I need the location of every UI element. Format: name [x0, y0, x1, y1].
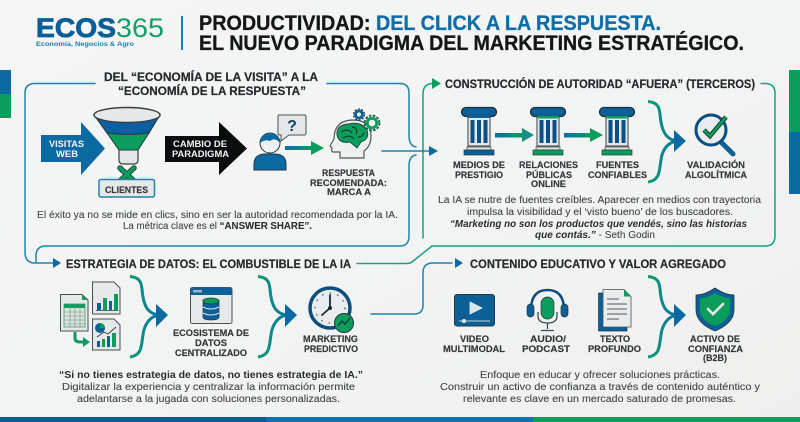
- column labels: [453, 160, 647, 189]
- label: respuesta recomendada: RESPUESTA: [322, 168, 375, 178]
- label: respuesta recomendada: RECOMENDADA:: [310, 178, 387, 188]
- body text: “Si no tienes estrategia de datos, no tienes estrategia de IA.”: [59, 369, 363, 381]
- arrow: cambio de paradigma: [165, 122, 247, 175]
- title: EL NUEVO PARADIGMA DEL MARKETING ESTRATÉGICO.: [199, 32, 744, 55]
- icon: podcast: [527, 290, 568, 330]
- icon: pie and trend document: [92, 319, 120, 350]
- column labels: FUENTES: [596, 160, 639, 170]
- brace arrow: [648, 276, 686, 357]
- panel heading: ESTRATEGIA DE DATOS: EL COMBUSTIBLE DE LA IA: [66, 259, 351, 271]
- body text: [59, 369, 363, 405]
- label: marketing predictivo: [303, 334, 358, 354]
- label: validacion: [685, 159, 747, 180]
- body text: “Marketing no son los productos que vendés, sino las historias: [450, 218, 747, 230]
- column labels: VIDEO: [460, 334, 489, 344]
- arrow: [495, 128, 534, 142]
- body text: relevante es clave en un mercado saturado de promesas.: [463, 393, 736, 405]
- panel heading: DEL “ECONOMÍA DE LA VISITA” A LA: [104, 71, 318, 84]
- arrow tips: [53, 78, 463, 268]
- column labels: AUDIO/: [530, 334, 567, 344]
- label: activo de confianza: [688, 334, 744, 363]
- column labels: RELACIONES: [519, 160, 578, 170]
- arrow: visitas web: VISITAS: [49, 139, 84, 149]
- bottom color bar: [0, 417, 800, 422]
- column labels: ONLINE: [531, 179, 566, 189]
- panel: estrategia de datos: [59, 259, 363, 405]
- panel: economia de la respuesta: [37, 71, 398, 232]
- label: marketing predictivo: PREDICTIVO: [304, 344, 358, 354]
- header divider: [181, 16, 183, 50]
- panel heading: [104, 71, 318, 98]
- label: activo de confianza: (B2B): [703, 353, 727, 363]
- body text: [438, 194, 761, 241]
- column labels: PRESTIGIO: [455, 170, 503, 180]
- column labels: [443, 334, 641, 354]
- body text: adelantarse a la jugada con soluciones personalizadas.: [77, 393, 340, 405]
- panel heading: “ECONOMÍA DE LA RESPUESTA”: [118, 85, 306, 98]
- title: [199, 12, 744, 55]
- icon: person with question: [254, 115, 306, 170]
- column labels: PÚBLICAS: [526, 169, 572, 180]
- label: activo de confianza: CONFIANZA: [688, 344, 744, 354]
- left side accent: [0, 70, 11, 118]
- body text: [440, 369, 761, 405]
- label: respuesta recomendada: MARCA A: [327, 187, 372, 197]
- label: ecosistema: [173, 328, 249, 358]
- column labels: MULTIMODAL: [443, 344, 506, 354]
- arrow: to answer: [285, 141, 324, 155]
- icon: column 3: [600, 108, 634, 155]
- logo: 365: [116, 13, 164, 43]
- icon: magnifier check: [696, 115, 733, 154]
- connector frames: [25, 84, 775, 314]
- arrow: cambio de paradigma: CAMBIO DE: [173, 139, 227, 149]
- icon: x mark: [120, 168, 134, 181]
- icon: data window: [190, 288, 232, 324]
- body text: El éxito ya no se mide en clics, sino en ser la autoridad recomendada por la IA.: [37, 209, 398, 221]
- title: PRODUCTIVIDAD: DEL CLICK A LA RESPUESTA.: [199, 12, 661, 35]
- label: ecosistema: DATOS: [195, 338, 227, 348]
- label: activo de confianza: ACTIVO DE: [690, 334, 740, 344]
- icon: shield: [696, 288, 734, 331]
- icon: column 1: [462, 108, 496, 155]
- body text: Enfoque en educar y ofrecer soluciones prácticas.: [480, 369, 720, 381]
- brace arrow: [130, 276, 168, 357]
- column labels: MEDIOS DE: [453, 160, 505, 170]
- column labels: PODCAST: [522, 344, 571, 354]
- icon: brain head with gears: [330, 109, 380, 158]
- icon: bar chart document: [92, 282, 120, 314]
- label: marketing predictivo: MARKETING: [303, 334, 358, 344]
- clientes box: [99, 180, 154, 197]
- arrow: cambio de paradigma: PARADIGMA: [172, 149, 230, 159]
- icon: video: [454, 294, 494, 326]
- column labels: PROFUNDO: [588, 344, 641, 354]
- brace arrow: [258, 276, 297, 357]
- icon: clock with trend: [310, 288, 354, 332]
- icon: green curved arrow: [75, 332, 90, 347]
- column labels: TEXTO: [600, 334, 630, 344]
- logo: Economía, Negocios & Agro: [36, 41, 134, 48]
- label: respuesta recomendada: [310, 168, 387, 197]
- icon: funnel: [94, 108, 160, 164]
- body text: [37, 209, 398, 232]
- label: validacion: VALIDACIÓN: [687, 159, 745, 170]
- icon: column 2: [530, 108, 566, 155]
- label: ecosistema: ECOSISTEMA DE: [173, 328, 249, 338]
- logo: [36, 13, 164, 48]
- right side accent: [789, 70, 800, 194]
- brace arrow: [648, 102, 686, 182]
- arrow: visitas web: [41, 122, 105, 175]
- column labels: CONFIABLES: [588, 170, 647, 180]
- panel: contenido educativo: [440, 259, 761, 405]
- clientes box: CLIENTES: [105, 185, 148, 195]
- arrow: [564, 128, 603, 142]
- icon: document: [598, 290, 631, 331]
- icon: spreadsheet: [60, 294, 88, 331]
- panel heading: CONSTRUCCIÓN DE AUTORIDAD “AFUERA” (TERCEROS): [445, 78, 755, 91]
- body text: La IA se nutre de fuentes creíbles. Aparecer en medios con trayectoria: [438, 194, 761, 206]
- body text: impulsa la visibilidad y el ‘visto bueno’ de los buscadores.: [467, 206, 733, 218]
- arrow: visitas web: WEB: [56, 149, 79, 159]
- panel heading: CONTENIDO EDUCATIVO Y VALOR AGREGADO: [470, 259, 726, 271]
- label: validacion: ALGOLÍTMICA: [685, 170, 747, 180]
- body text: La métrica clave es el “ANSWER SHARE”.: [123, 220, 312, 232]
- logo: ECOS: [36, 13, 116, 43]
- icon: person with question: ?: [287, 118, 297, 135]
- panel: construccion de autoridad: [438, 78, 761, 241]
- body text: Construir un activo de confianza a través de contenido auténtico y: [440, 381, 761, 393]
- label: ecosistema: CENTRALIZADO: [175, 348, 247, 358]
- body text: que contás.” - Seth Godin: [535, 229, 655, 241]
- body text: Digitalizar la experiencia y centralizar la información permite: [62, 381, 355, 393]
